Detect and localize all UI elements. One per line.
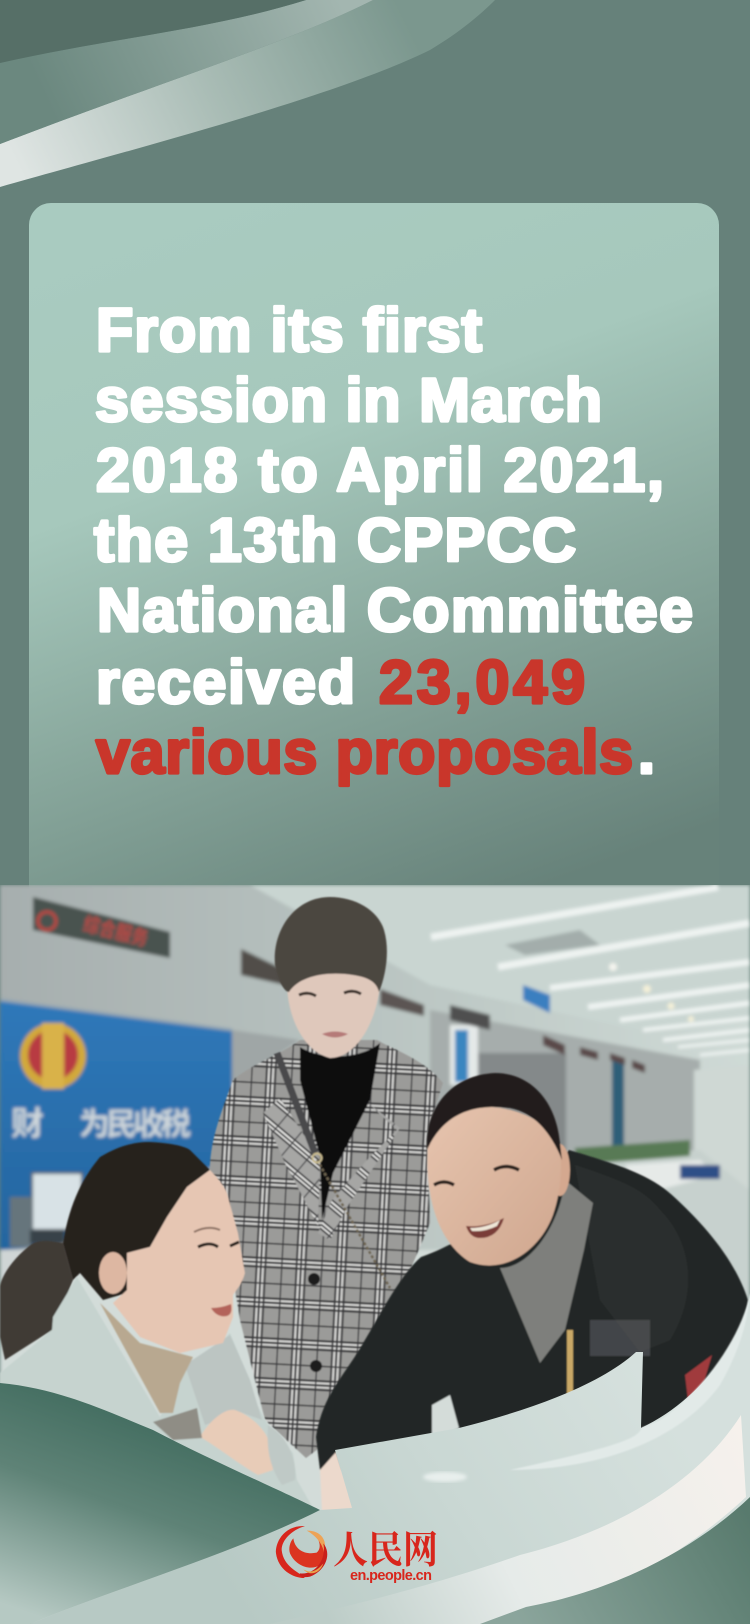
headline text: received <box>96 648 355 716</box>
headline text <box>94 296 693 786</box>
hand <box>320 1452 354 1512</box>
headline text: various proposals <box>96 718 633 786</box>
hair <box>63 1142 210 1300</box>
person: woman on left <box>0 1142 320 1520</box>
bottom-left dark swoosh <box>0 1383 320 1624</box>
hall background: 综合服务 <box>81 913 150 951</box>
black turtleneck <box>300 1043 380 1220</box>
logo wordmark: 人民网 <box>333 1530 438 1572</box>
top decorative ribbon <box>0 0 495 187</box>
logo: People's Daily Online <box>276 1526 438 1584</box>
headline text: National Committee <box>97 576 693 644</box>
grey wall between <box>230 1030 298 1085</box>
photo: three people at a tax service hall <box>0 885 750 1624</box>
lapels <box>263 1098 320 1226</box>
ear <box>558 1143 572 1198</box>
bottom ribbon: cream highlight <box>270 1415 746 1624</box>
buttons <box>308 1273 320 1285</box>
neck and face <box>286 972 380 1060</box>
bottom ribbon: pale sheet and band <box>30 1293 750 1624</box>
face <box>427 1107 561 1265</box>
hall background: 为民收税 <box>79 1107 191 1142</box>
bag strap and chain <box>277 1053 315 1153</box>
emblem <box>20 1023 86 1089</box>
far walls and columns <box>430 1010 700 1160</box>
red patch <box>685 1355 712 1400</box>
plaid coat <box>210 1040 443 1458</box>
bottom-right dark corner <box>480 1497 750 1624</box>
monitor <box>32 1173 82 1230</box>
wall slogan: 财 <box>11 1105 44 1142</box>
coat <box>0 1277 320 1520</box>
hair <box>275 897 387 992</box>
hair <box>427 1073 562 1160</box>
blue wall <box>0 1000 232 1250</box>
phone <box>153 1408 202 1440</box>
headline text: From its first <box>96 296 482 364</box>
mouth <box>466 1218 504 1238</box>
ceiling light strips <box>431 887 750 1055</box>
person: standing woman <box>210 897 443 1458</box>
headline text: 23,049 <box>379 648 585 716</box>
ponytail <box>0 1241 73 1360</box>
logo on jacket <box>590 1320 650 1356</box>
overhead signs <box>33 897 170 958</box>
headline text: . <box>638 718 655 786</box>
grey turtleneck <box>500 1180 593 1363</box>
hall background <box>0 885 750 1624</box>
logo url: en.people.cn <box>350 1568 432 1584</box>
eye and mouth <box>198 1242 239 1247</box>
hand <box>200 1410 273 1475</box>
jacket <box>316 1150 748 1470</box>
icon: logo swirl <box>276 1526 327 1578</box>
person: man in black jacket <box>316 1073 748 1512</box>
headline text: 2018 to April 2021, <box>96 436 664 504</box>
ear <box>99 1252 127 1294</box>
sleeve cuff <box>268 1425 295 1485</box>
panel: headline card <box>29 203 719 923</box>
gap between sleeve and body <box>432 1395 459 1440</box>
headline text: session in March <box>95 366 602 434</box>
beige turtleneck <box>100 1303 193 1413</box>
face <box>113 1170 245 1353</box>
eyes and mouth <box>299 993 316 996</box>
zip <box>567 1330 573 1410</box>
headline text: the 13th CPPCC <box>94 506 576 574</box>
eyes <box>434 1182 454 1185</box>
